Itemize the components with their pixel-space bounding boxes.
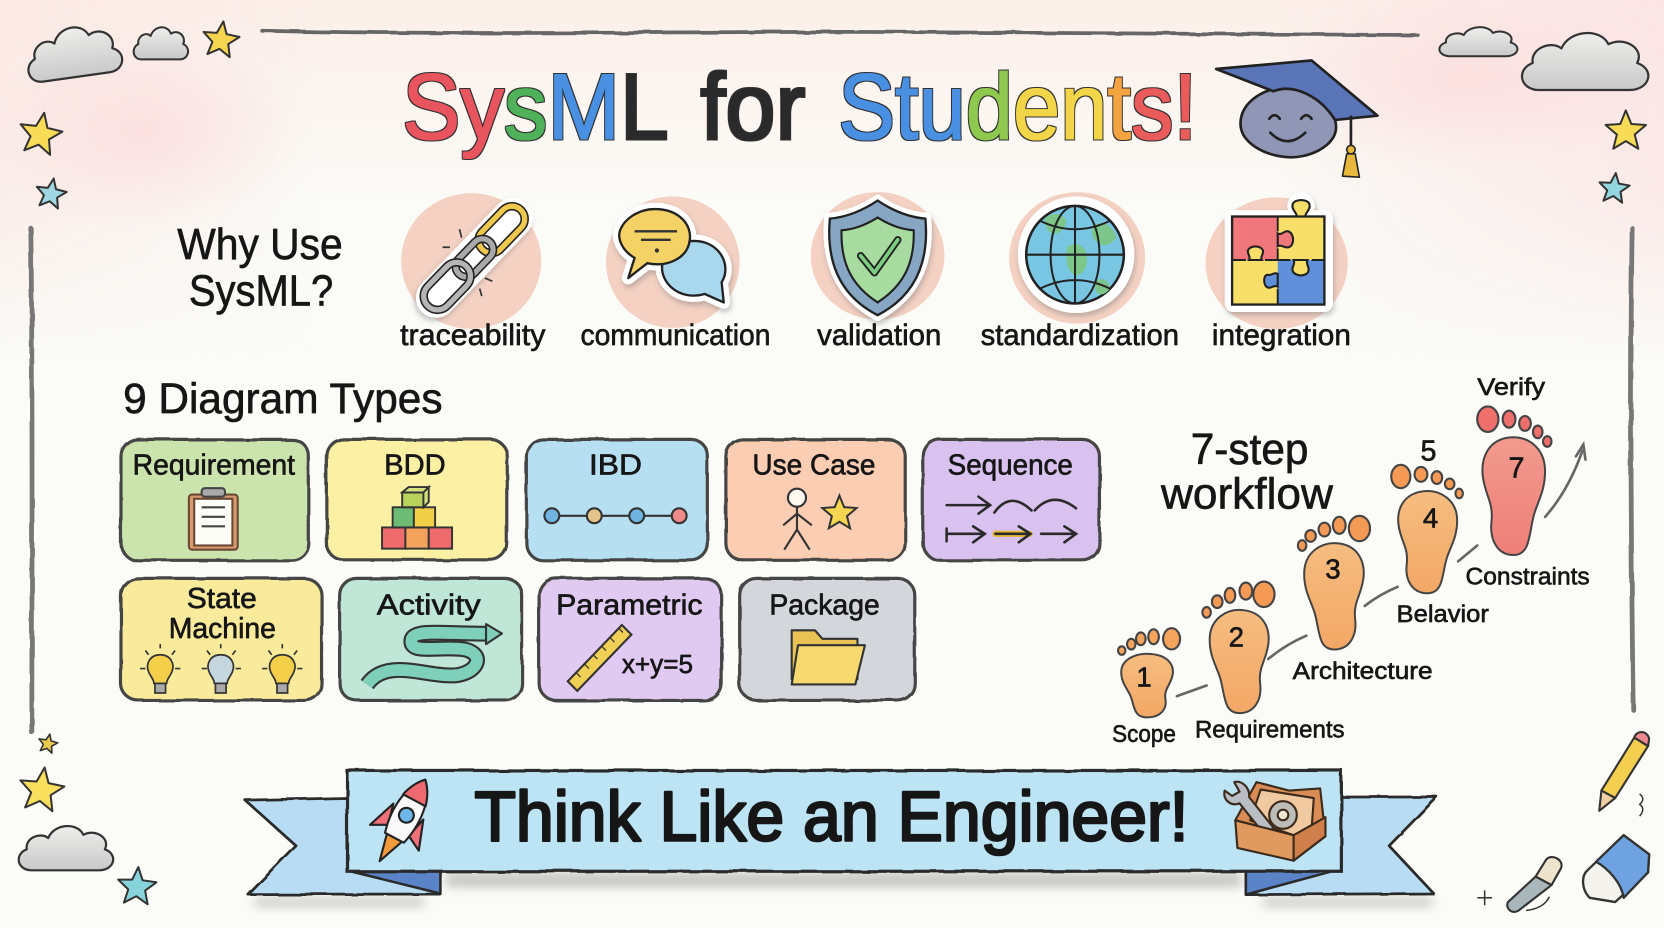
card: sequence xyxy=(923,439,1099,560)
step labels: Constraints xyxy=(1466,564,1590,591)
icon: traceability chain xyxy=(401,190,541,329)
top right clouds and stars xyxy=(1439,27,1648,203)
banner text: Think Like an Engineer! xyxy=(474,777,1189,855)
heading: why use sysml xyxy=(177,221,343,316)
card: ibd: IBD xyxy=(589,449,642,481)
cloud small xyxy=(134,27,188,59)
step 3 architecture: 3 xyxy=(1325,553,1341,584)
icon: connected nodes xyxy=(544,508,687,523)
labels: why use sysml: integration xyxy=(1212,319,1351,352)
step labels: Scope xyxy=(1112,721,1176,748)
step labels: Architecture xyxy=(1293,658,1433,685)
icon: stacked blocks xyxy=(382,487,452,549)
chart: workflow footprints xyxy=(1112,374,1590,748)
title xyxy=(402,54,1197,159)
card: bdd xyxy=(327,439,507,560)
icon: sequence arrows xyxy=(947,497,1076,542)
heading: why use sysml: SysML? xyxy=(189,268,333,316)
card: parametric: x+y=5 xyxy=(622,651,693,679)
star yellow xyxy=(17,764,67,812)
banner: think like an engineer xyxy=(245,767,1437,906)
heading: 7-step workflow xyxy=(1160,426,1333,518)
ribbon folds xyxy=(350,870,440,894)
star small yellow xyxy=(37,732,59,754)
icon: winding path arrow xyxy=(367,624,502,684)
star blue left xyxy=(34,176,69,210)
bottom left stars and cloud xyxy=(17,732,157,905)
labels: why use sysml: communication xyxy=(580,319,770,352)
labels: why use sysml: traceability xyxy=(400,319,546,352)
star blue xyxy=(117,866,157,905)
panel: why use sysml icons xyxy=(400,190,1351,352)
card: package xyxy=(740,578,915,700)
star yellow right xyxy=(1606,110,1646,149)
step labels xyxy=(1112,374,1590,748)
icon: integration puzzle xyxy=(1206,192,1348,329)
icon: pen tool xyxy=(1477,857,1562,912)
card: parametric: Parametric xyxy=(556,589,703,621)
icon: rocket xyxy=(357,767,450,875)
card: use case xyxy=(726,439,905,560)
panel: diagram type cards xyxy=(121,439,1099,700)
icon: actor and star xyxy=(783,489,857,550)
card: use case: Use Case xyxy=(752,449,876,481)
icon: communication speech bubbles xyxy=(606,196,740,328)
arrow: up to verify xyxy=(1545,445,1585,517)
card: sequence: Sequence xyxy=(948,449,1073,481)
cloud small right xyxy=(1439,27,1517,56)
card: activity: Activity xyxy=(377,589,481,621)
icon: eraser xyxy=(1583,835,1649,902)
title: Students! xyxy=(838,54,1197,159)
heading: 7-step workflow: 7-step xyxy=(1191,426,1308,474)
icon: toolbox xyxy=(1224,782,1325,861)
card: package: Package xyxy=(769,589,880,621)
step 7 verify xyxy=(1477,406,1552,555)
title: SysML xyxy=(402,54,669,159)
heading: 9 diagram types: 9 Diagram Types xyxy=(123,375,443,422)
icon: light bulbs xyxy=(140,644,302,693)
ribbon left tail xyxy=(245,798,440,895)
step 7 verify: 7 xyxy=(1509,453,1524,485)
icon: clipboard xyxy=(189,488,238,550)
icon: pencil xyxy=(1599,732,1649,816)
card: state machine xyxy=(121,578,322,700)
card: state machine: State xyxy=(187,583,257,615)
step labels: Verify xyxy=(1477,374,1546,401)
card: requirement xyxy=(121,439,309,560)
banner shadow xyxy=(255,872,1433,906)
step 1 scope xyxy=(1118,628,1180,717)
card: ibd xyxy=(526,439,708,560)
card: requirement: Requirement xyxy=(133,449,295,481)
top left clouds and stars xyxy=(16,19,241,210)
cloud xyxy=(19,826,113,870)
step labels: 5 xyxy=(1420,436,1436,468)
ribbon main xyxy=(347,770,1341,871)
icon: folder xyxy=(792,630,865,684)
heading: why use sysml: Why Use xyxy=(177,221,343,269)
star yellow left xyxy=(16,109,65,156)
star blue right xyxy=(1598,171,1631,203)
heading: 7-step workflow: workflow xyxy=(1160,470,1333,518)
card: parametric xyxy=(539,578,722,700)
icon: graduation cap mascot xyxy=(1216,60,1377,177)
step 2 requirements: 2 xyxy=(1229,621,1244,652)
sketched page border xyxy=(31,31,1633,732)
icon: validation shield xyxy=(811,192,944,319)
step 1 scope: 1 xyxy=(1136,662,1152,693)
cloud large xyxy=(23,21,124,83)
background wash xyxy=(0,0,1664,290)
icon: ruler xyxy=(568,625,631,691)
card: bdd: BDD xyxy=(384,449,446,481)
step labels: Requirements xyxy=(1195,717,1345,744)
connector dashes xyxy=(1177,545,1477,696)
step labels: Belavior xyxy=(1397,601,1489,628)
ribbon right tail xyxy=(1246,797,1437,895)
labels: why use sysml: validation xyxy=(817,319,941,352)
card: activity xyxy=(340,578,522,700)
labels: why use sysml xyxy=(400,319,1351,352)
title: for xyxy=(700,54,805,159)
step 4 behavior: 4 xyxy=(1423,502,1438,533)
step 4 behavior xyxy=(1391,465,1463,593)
labels: why use sysml: standardization xyxy=(981,319,1179,352)
star yellow top xyxy=(201,19,241,58)
step 3 architecture xyxy=(1298,516,1370,649)
step 2 requirements xyxy=(1202,582,1275,713)
card: state machine: Machine xyxy=(169,613,276,645)
cloud large right xyxy=(1522,33,1648,90)
icon: standardization globe xyxy=(1009,192,1145,324)
